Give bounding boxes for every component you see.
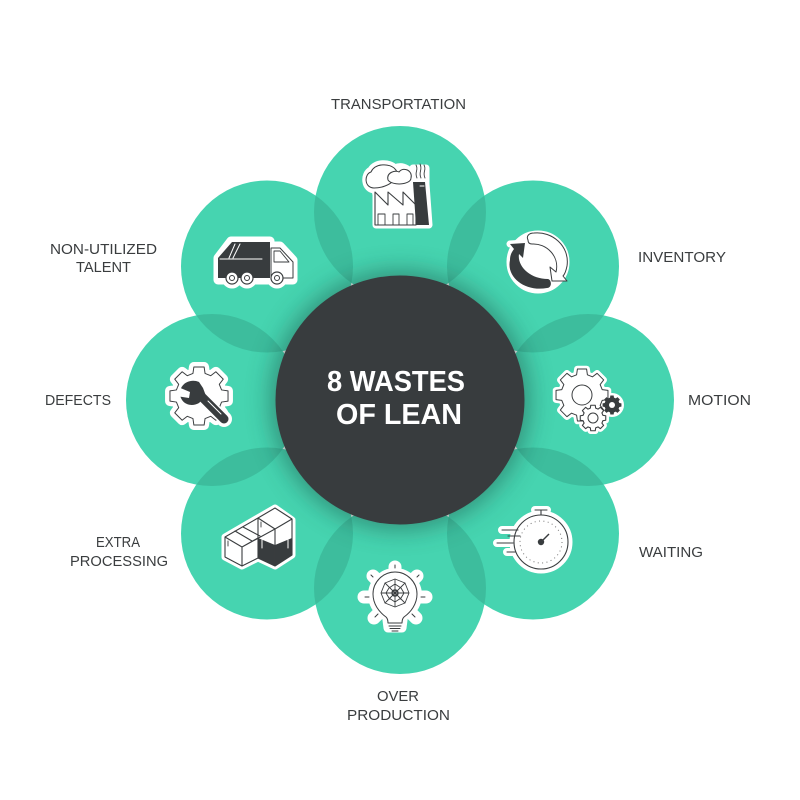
icon: gear with wrench	[170, 367, 228, 425]
center circle with title	[276, 276, 524, 524]
label: transportation: TRANSPORTATION	[331, 97, 466, 113]
label: non-utilized talent	[50, 242, 157, 276]
icon: stopwatch	[497, 510, 568, 569]
label: non-utilized talent: NON-UTILIZED	[50, 242, 157, 258]
label: extra processing	[70, 535, 168, 570]
icon: gears	[556, 369, 624, 431]
icon: refresh arrows	[509, 233, 567, 289]
label: extra processing: PROCESSING	[70, 554, 168, 570]
panel: petal ring	[126, 126, 674, 674]
label: over production	[347, 689, 450, 724]
infographic canvas	[46, 99, 750, 720]
icon: truck	[218, 241, 293, 288]
icon: factory	[366, 164, 429, 225]
label: inventory: INVENTORY	[638, 250, 726, 266]
icon: light bulb with spiderweb	[364, 565, 426, 631]
label: defects: DEFECTS	[45, 393, 111, 409]
label: over production: OVER	[377, 689, 419, 705]
label: motion: MOTION	[688, 393, 751, 409]
icon: stacked boxes	[225, 508, 292, 566]
label: extra processing: EXTRA	[96, 535, 140, 551]
label: waiting: WAITING	[639, 545, 703, 561]
center circle shadow	[272, 272, 528, 528]
label: over production: PRODUCTION	[347, 708, 450, 724]
center circle with title: 8 WASTES	[327, 366, 465, 398]
label: non-utilized talent: TALENT	[76, 260, 131, 276]
center circle with title: OF LEAN	[336, 399, 462, 431]
